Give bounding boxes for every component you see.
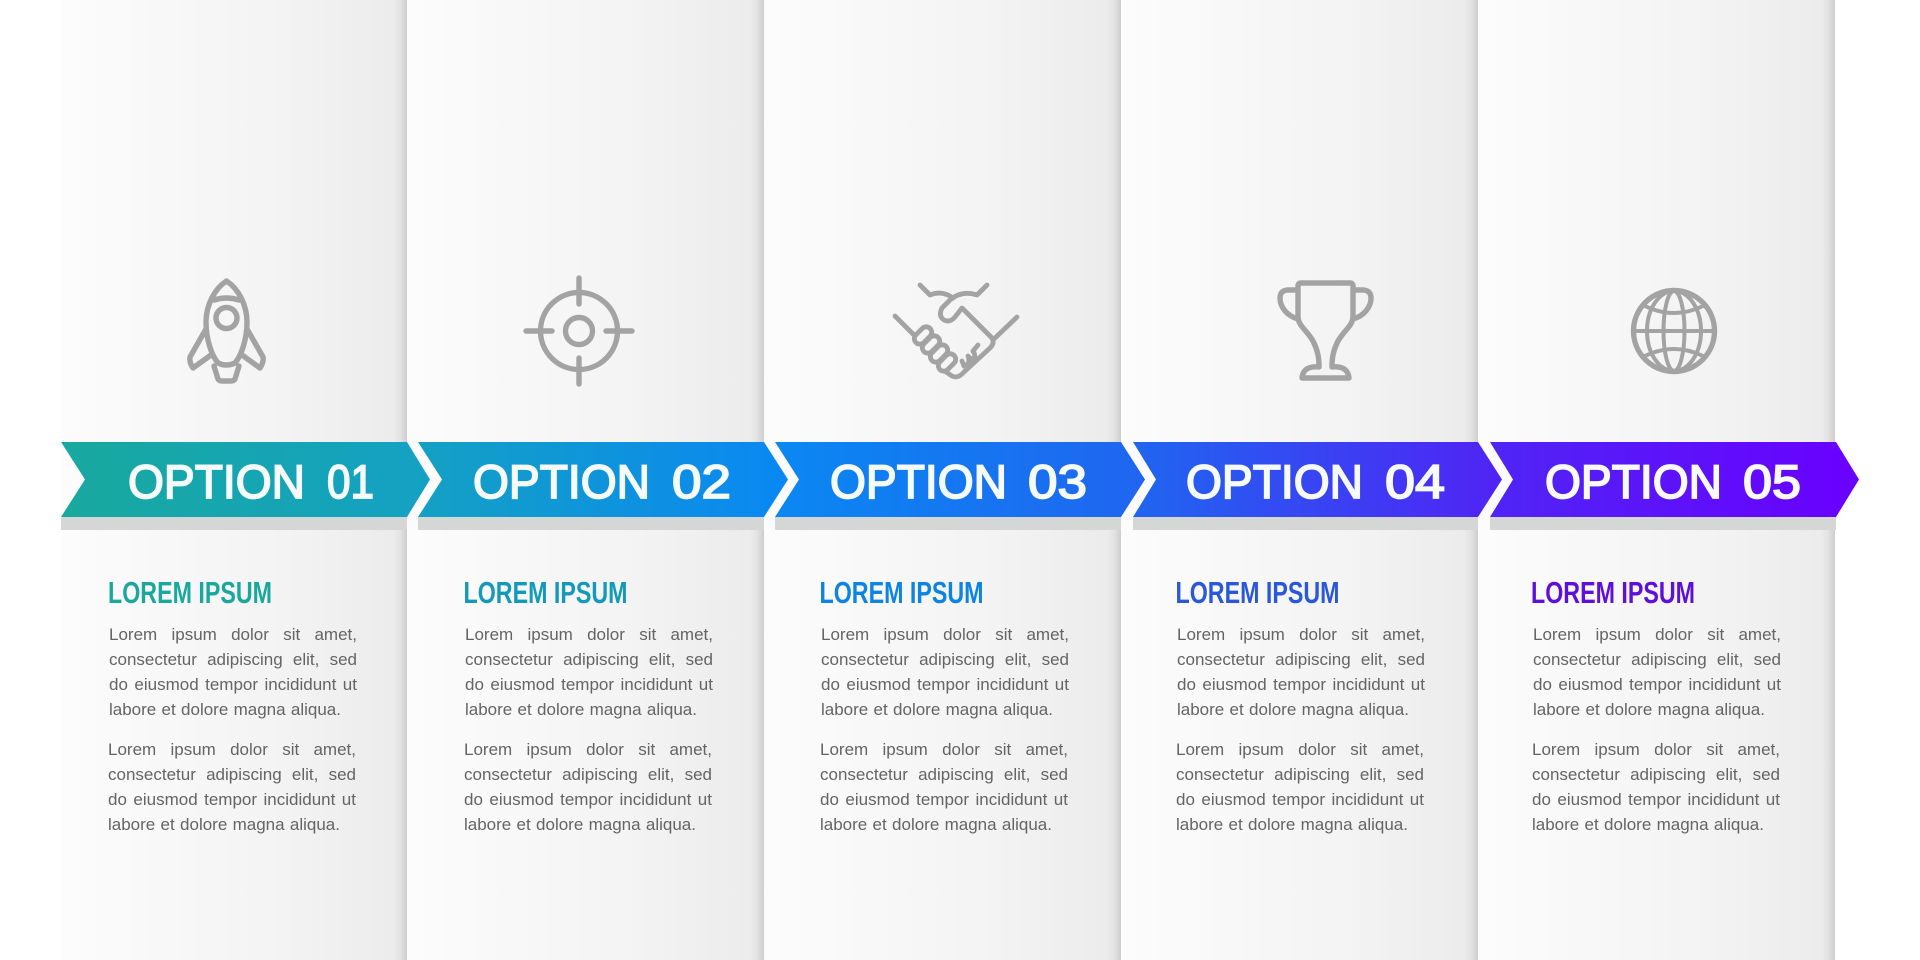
text block: column 2 paragraph 1: do eiusmod tempor incididunt ut — [465, 675, 713, 694]
text block: column 1 paragraph 1: labore et dolore magna aliqua. — [109, 700, 341, 719]
text block: column 4 paragraph 1 — [1177, 624, 1425, 719]
ribbon: option 04: 04 — [1385, 455, 1445, 508]
text block: column 3 paragraph 1 — [821, 624, 1069, 719]
panel: column 2 background — [407, 0, 764, 960]
ribbon: option 05: OPTION — [1545, 455, 1722, 508]
text block: column 3 paragraph 2: do eiusmod tempor incididunt ut — [820, 790, 1068, 809]
text block: column 2 paragraph 1: labore et dolore magna aliqua. — [465, 700, 697, 719]
text block: column 4 paragraph 1: do eiusmod tempor incididunt ut — [1177, 675, 1425, 694]
text block: column 4 paragraph 2: Lorem ipsum dolor sit amet, — [1176, 740, 1424, 758]
ribbon: option 04: OPTION — [1186, 455, 1363, 508]
text block: column 1 paragraph 1: consectetur adipiscing elit, sed — [109, 650, 357, 669]
heading: column 4: LOREM IPSUM — [1176, 576, 1340, 610]
ribbon: option 03 — [775, 442, 1145, 530]
text block: column 3 paragraph 1: do eiusmod tempor incididunt ut — [821, 675, 1069, 694]
text block: column 5 paragraph 1: consectetur adipiscing elit, sed — [1533, 650, 1781, 669]
text block: column 1 paragraph 1: do eiusmod tempor incididunt ut — [109, 675, 357, 694]
text block: column 5 paragraph 2: consectetur adipiscing elit, sed — [1532, 765, 1780, 784]
text block: column 1 paragraph 2 — [108, 740, 356, 834]
text block: column 3 paragraph 1: labore et dolore magna aliqua. — [821, 700, 1053, 719]
text block: column 3 paragraph 2: labore et dolore magna aliqua. — [820, 815, 1052, 834]
icon: trophy — [1280, 283, 1371, 378]
text block: column 2 paragraph 2: consectetur adipiscing elit, sed — [464, 765, 712, 784]
text block: column 5 paragraph 1: labore et dolore magna aliqua. — [1533, 700, 1765, 719]
text block: column 4 paragraph 2 — [1176, 740, 1424, 834]
ribbon: option 05: 05 — [1743, 455, 1801, 508]
icon: globe — [1634, 290, 1714, 372]
ribbon: option 03: 03 — [1028, 455, 1087, 508]
ribbon: option 03: OPTION — [830, 455, 1007, 508]
text block: column 2 paragraph 2: do eiusmod tempor incididunt ut — [464, 790, 712, 809]
text block: column 5 paragraph 2: labore et dolore magna aliqua. — [1532, 815, 1764, 834]
text block: column 4 paragraph 1: labore et dolore magna aliqua. — [1177, 700, 1409, 719]
text block: column 1 paragraph 2: labore et dolore magna aliqua. — [108, 815, 340, 834]
heading: column 2: LOREM IPSUM — [464, 576, 628, 610]
text block: column 1 paragraph 2: consectetur adipiscing elit, sed — [108, 765, 356, 784]
heading: column 5: LOREM IPSUM — [1531, 576, 1695, 610]
ribbon: option 05 — [1490, 442, 1859, 530]
panel: column 1 background — [62, 0, 407, 960]
panel: column 5 background — [1478, 0, 1835, 960]
text block: column 2 paragraph 2 — [464, 740, 712, 834]
ribbon: option 04 — [1133, 442, 1502, 530]
heading: column 3: LOREM IPSUM — [820, 576, 984, 610]
text block: column 5 paragraph 2 — [1532, 740, 1780, 834]
text block: column 2 paragraph 2: Lorem ipsum dolor sit amet, — [464, 740, 712, 758]
icon: handshake — [895, 285, 1017, 377]
text block: column 4 paragraph 2: labore et dolore magna aliqua. — [1176, 815, 1408, 834]
text block: column 3 paragraph 2: consectetur adipiscing elit, sed — [820, 765, 1068, 784]
heading: column 1: LOREM IPSUM — [108, 576, 272, 610]
text block: column 3 paragraph 2: Lorem ipsum dolor sit amet, — [820, 740, 1068, 758]
text block: column 4 paragraph 1: Lorem ipsum dolor sit amet, — [1177, 624, 1425, 644]
panel: column 3 background — [764, 0, 1121, 960]
text block: column 3 paragraph 1: consectetur adipiscing elit, sed — [821, 650, 1069, 669]
text block: column 5 paragraph 1: Lorem ipsum dolor sit amet, — [1533, 624, 1781, 644]
text block: column 5 paragraph 1 — [1533, 624, 1781, 719]
text block: column 3 paragraph 1: Lorem ipsum dolor sit amet, — [821, 624, 1069, 644]
icon: rocket — [190, 281, 263, 381]
text block: column 2 paragraph 1: Lorem ipsum dolor sit amet, — [465, 624, 713, 644]
text block: column 4 paragraph 1: consectetur adipiscing elit, sed — [1177, 650, 1425, 669]
text block: column 4 paragraph 2: do eiusmod tempor incididunt ut — [1176, 790, 1424, 809]
ribbon: option 01: 01 — [327, 455, 374, 508]
text block: column 1 paragraph 1: Lorem ipsum dolor sit amet, — [109, 624, 357, 644]
text block: column 1 paragraph 2: do eiusmod tempor incididunt ut — [108, 790, 356, 809]
text block: column 2 paragraph 2: labore et dolore magna aliqua. — [464, 815, 696, 834]
text block: column 2 paragraph 1 — [465, 624, 713, 719]
icon: target — [526, 278, 632, 384]
text block: column 4 paragraph 2: consectetur adipiscing elit, sed — [1176, 765, 1424, 784]
panel: column 4 background — [1121, 0, 1478, 960]
text block: column 5 paragraph 2: do eiusmod tempor incididunt ut — [1532, 790, 1780, 809]
ribbon: option 02 — [418, 442, 788, 530]
text block: column 1 paragraph 1 — [109, 624, 357, 719]
text block: column 3 paragraph 2 — [820, 740, 1068, 834]
text block: column 1 paragraph 2: Lorem ipsum dolor sit amet, — [108, 740, 356, 758]
ribbon: option 02: 02 — [672, 455, 731, 508]
text block: column 2 paragraph 1: consectetur adipiscing elit, sed — [465, 650, 713, 669]
text block: column 5 paragraph 1: do eiusmod tempor incididunt ut — [1533, 675, 1781, 694]
ribbon: option 01 — [61, 442, 430, 530]
ribbon: option 01: OPTION — [128, 455, 305, 508]
text block: column 5 paragraph 2: Lorem ipsum dolor sit amet, — [1532, 740, 1780, 758]
ribbon: option 02: OPTION — [473, 455, 650, 508]
